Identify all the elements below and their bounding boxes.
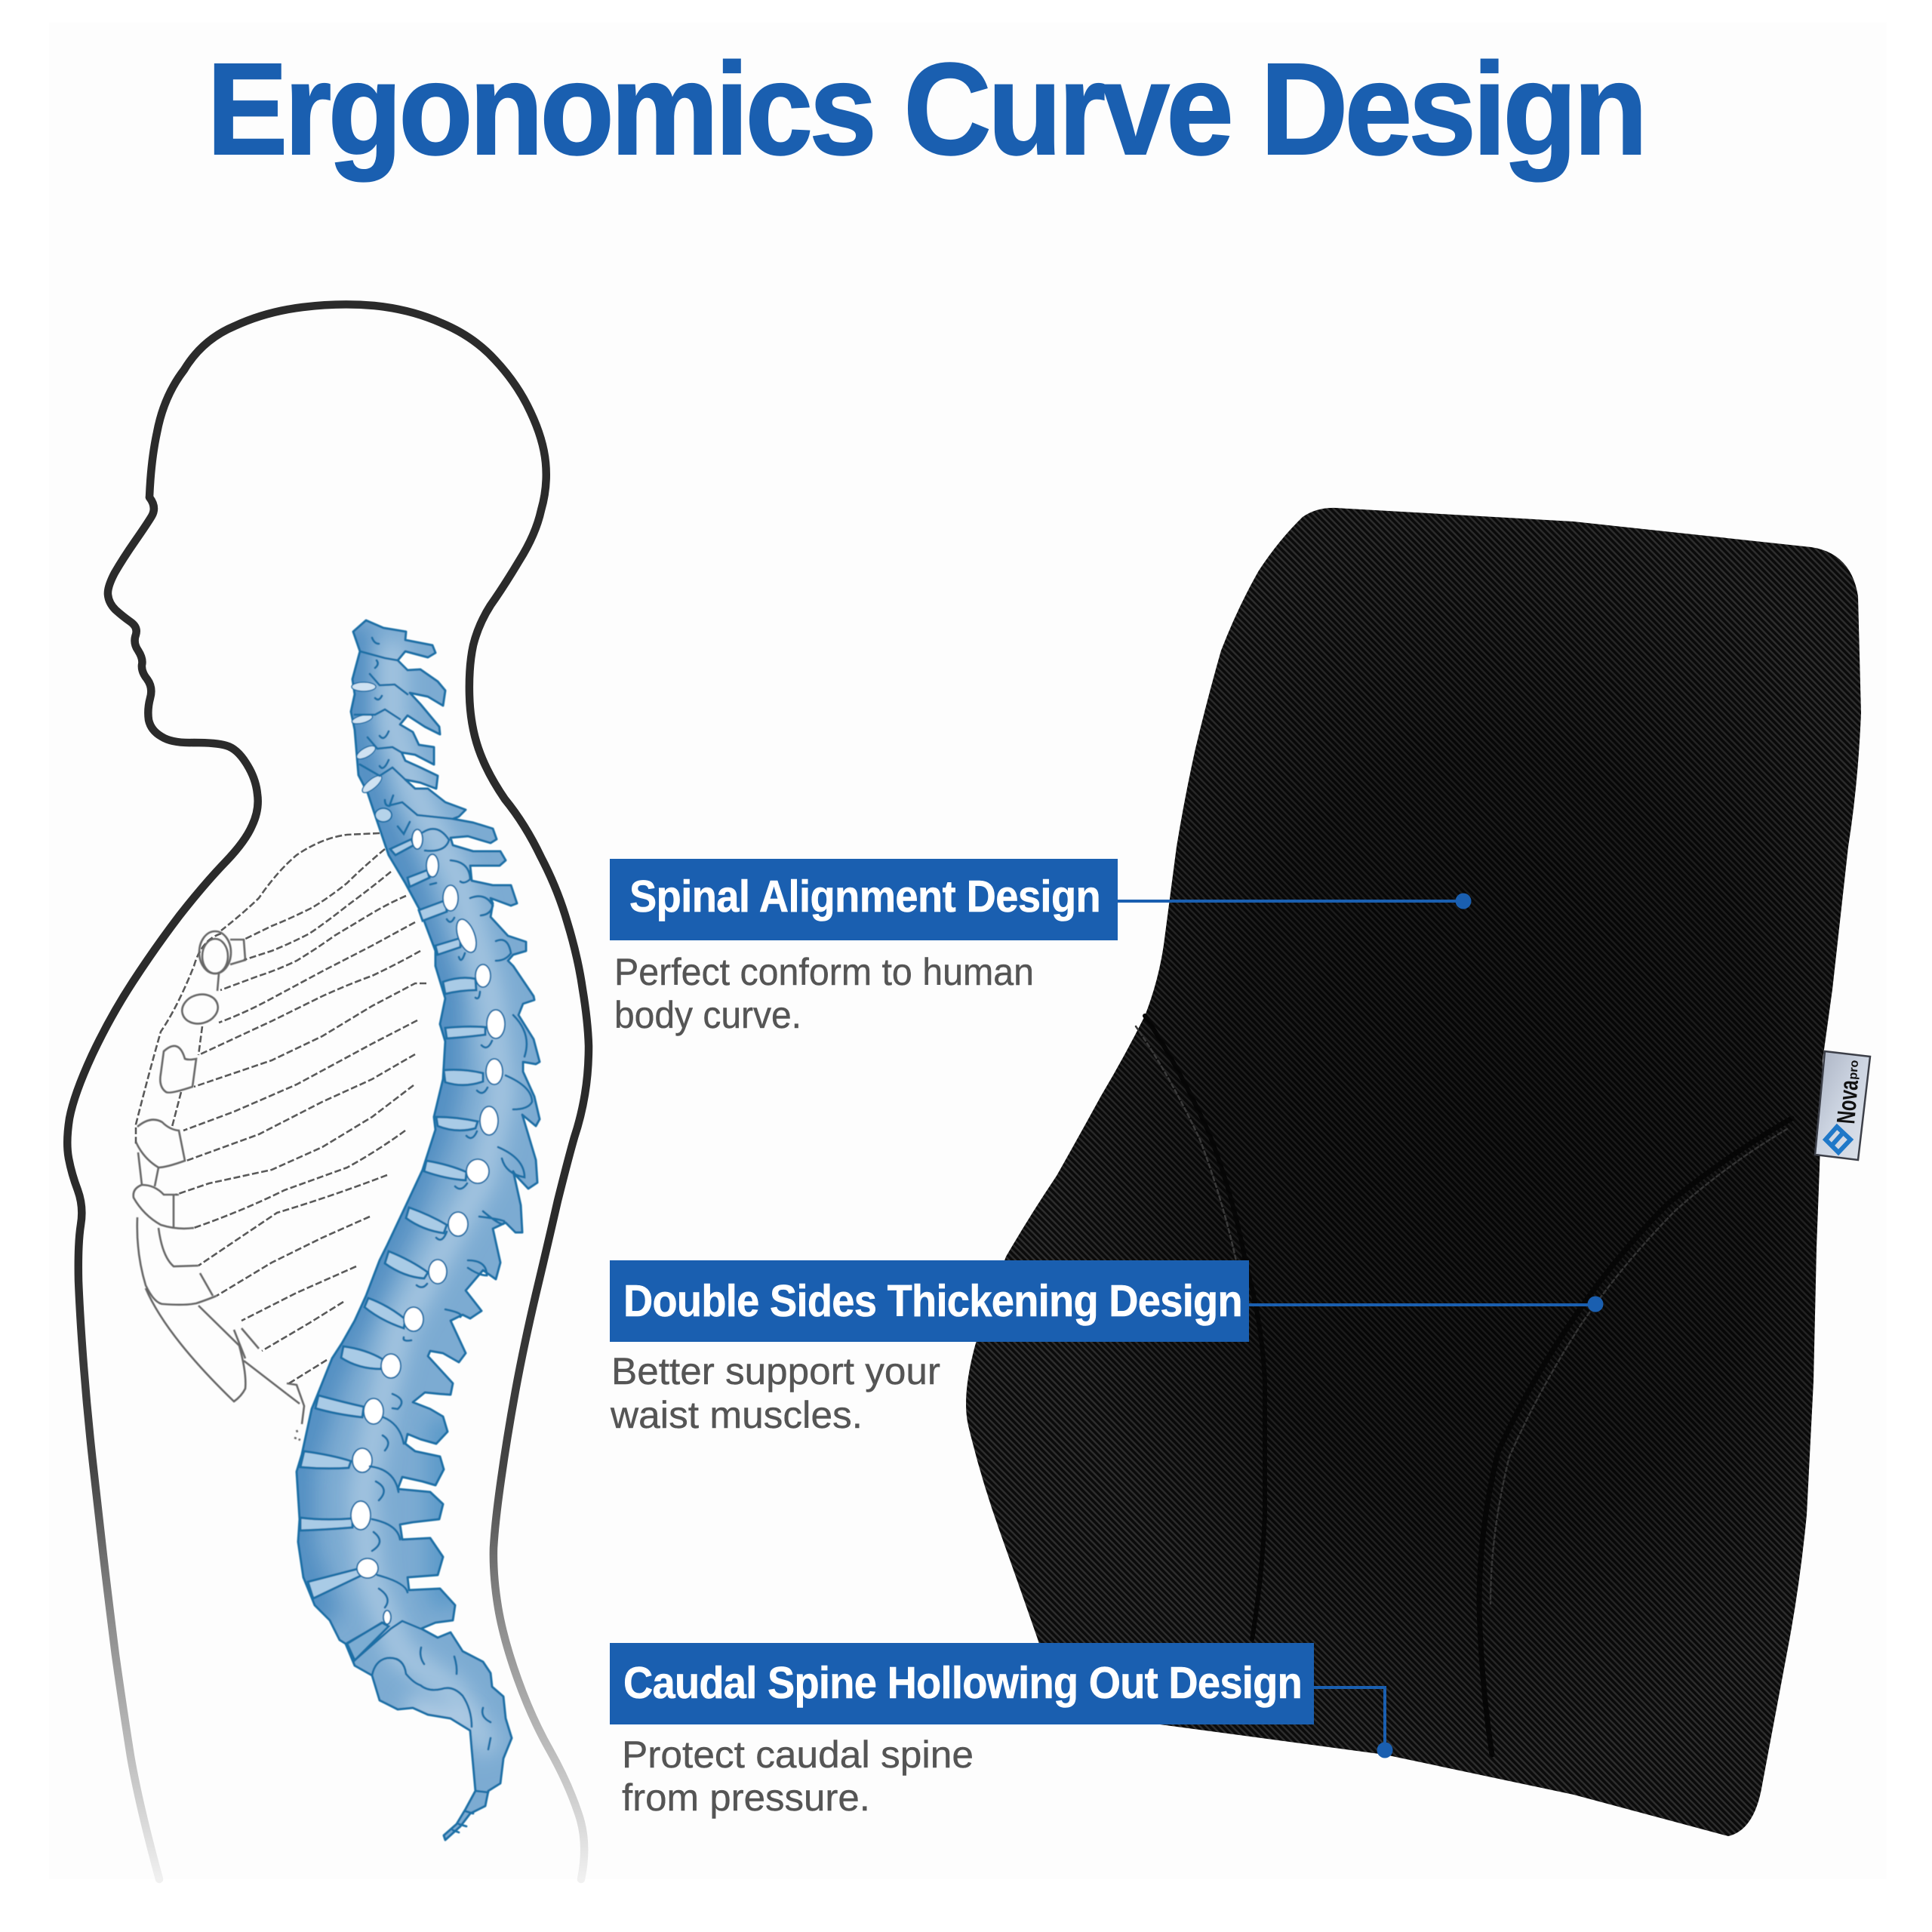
spine silhouette with shading bbox=[297, 622, 539, 1838]
callout: caudal spine bbox=[610, 1643, 1393, 1819]
vertebra detail lines bbox=[347, 638, 532, 1832]
tag body bbox=[1815, 1051, 1870, 1160]
callout: spinal alignment bbox=[610, 859, 1472, 1036]
description: Protect caudal spine bbox=[622, 1734, 974, 1776]
cushion body with mesh texture bbox=[966, 508, 1861, 1836]
dashed ribs bbox=[136, 833, 426, 1383]
banner bbox=[610, 1260, 1249, 1342]
description: body curve. bbox=[614, 994, 801, 1036]
banner label: Caudal Spine Hollowing Out Design bbox=[623, 1659, 1303, 1709]
leader dot bbox=[1455, 894, 1472, 909]
leader dot bbox=[1588, 1297, 1603, 1312]
foramina bbox=[351, 829, 505, 1624]
description: from pressure. bbox=[622, 1777, 870, 1819]
title: Ergonomics Curve Design bbox=[207, 37, 1647, 182]
tag suffix: pro bbox=[1847, 1060, 1861, 1080]
leader line bbox=[1249, 1303, 1595, 1306]
head and back contour bbox=[149, 304, 589, 1879]
description: Perfect conform to human bbox=[614, 951, 1034, 993]
lumbar cushion bbox=[966, 508, 1861, 1836]
cushion central shadow bbox=[966, 508, 1861, 1836]
costal cartilage bbox=[134, 931, 304, 1440]
banner bbox=[610, 1643, 1314, 1724]
tag logo bbox=[1826, 1127, 1850, 1152]
human body outline bbox=[67, 304, 589, 1879]
callout: double sides bbox=[610, 1260, 1603, 1436]
description: waist muscles. bbox=[610, 1394, 863, 1436]
intervertebral discs bbox=[300, 682, 485, 1660]
banner label: Double Sides Thickening Design bbox=[623, 1277, 1243, 1327]
rib cage bbox=[134, 833, 426, 1440]
banner label: Spinal Alignment Design bbox=[629, 872, 1101, 922]
tag wordmark: Nova bbox=[1832, 1078, 1864, 1125]
leader line bbox=[1118, 900, 1463, 903]
spine outline bbox=[297, 620, 540, 1840]
left seam bbox=[1136, 1016, 1792, 1755]
description: Better support your bbox=[611, 1350, 940, 1392]
spine bbox=[294, 619, 542, 1841]
banner bbox=[610, 859, 1118, 940]
leader line bbox=[1314, 1687, 1385, 1750]
leader dot bbox=[1377, 1742, 1393, 1758]
face and chest contour bbox=[67, 497, 258, 1879]
right seam bbox=[1479, 1118, 1792, 1755]
brand tag bbox=[1815, 1051, 1870, 1160]
